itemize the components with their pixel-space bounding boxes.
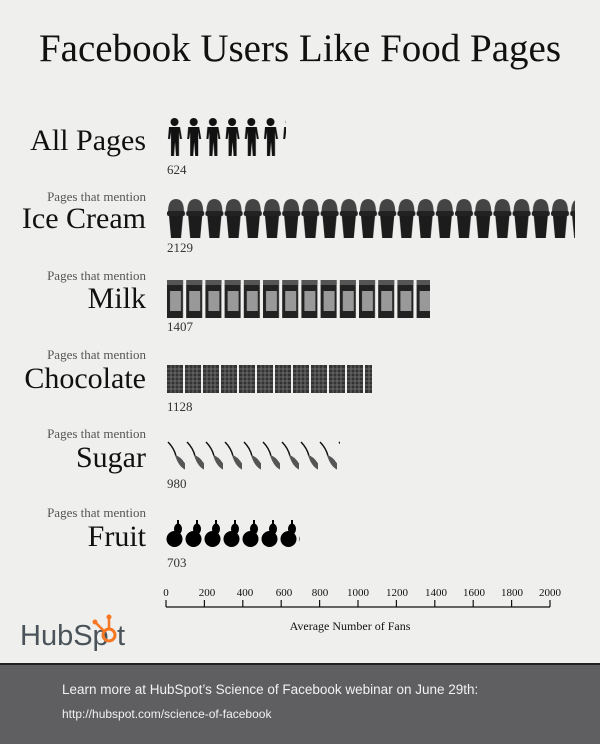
- footer band: Learn more at HubSpot’s Science of Facebook webinar on June 29th:: [62, 682, 478, 697]
- row: milk: Milk: [88, 282, 146, 315]
- row: all pages: All Pages: [30, 124, 146, 157]
- axis: 1800: [501, 587, 524, 599]
- axis: 1000: [347, 587, 370, 599]
- title: Facebook Users Like Food Pages: [39, 27, 561, 70]
- axis: 2000: [539, 587, 562, 599]
- row: chocolate: 1128: [167, 399, 193, 414]
- axis: Average Number of Fans: [290, 619, 411, 633]
- row: ice cream: Ice Cream: [22, 202, 146, 235]
- logo: HubSpot: HubSp: [20, 620, 109, 652]
- axis: 1400: [425, 587, 448, 599]
- row: fruit: Fruit: [88, 520, 147, 553]
- axis: 800: [312, 587, 329, 599]
- axis: [163, 587, 562, 633]
- row: sugar: 980: [167, 476, 186, 491]
- row: fruit: 703: [167, 555, 186, 570]
- row: chocolate: Pages that mention: [47, 347, 146, 362]
- axis: 1200: [386, 587, 408, 599]
- row: milk: 1407: [167, 319, 194, 334]
- row: fruit: [47, 505, 300, 570]
- row: all pages: 624: [167, 162, 187, 177]
- row: chocolate: Chocolate: [24, 362, 146, 395]
- footer band: http://hubspot.com/science-of-facebook: [62, 707, 272, 721]
- axis: 200: [199, 587, 216, 599]
- axis: 1600: [463, 587, 486, 599]
- row: ice cream: [22, 189, 575, 255]
- row: sugar: [47, 426, 340, 491]
- row: ice cream: 2129: [167, 240, 193, 255]
- row: milk: [47, 268, 430, 334]
- row: chocolate: [24, 347, 372, 414]
- row: all pages: [30, 115, 286, 177]
- row: sugar: Sugar: [76, 441, 146, 474]
- row: sugar: Pages that mention: [47, 426, 146, 441]
- axis: 400: [237, 587, 254, 599]
- row: milk: Pages that mention: [47, 268, 146, 283]
- axis: 600: [276, 587, 293, 599]
- row: fruit: Pages that mention: [47, 505, 146, 520]
- axis: 0: [163, 587, 169, 599]
- logo: HubSpot: t: [117, 620, 125, 652]
- row: ice cream: Pages that mention: [47, 189, 146, 204]
- footer band: [0, 663, 600, 744]
